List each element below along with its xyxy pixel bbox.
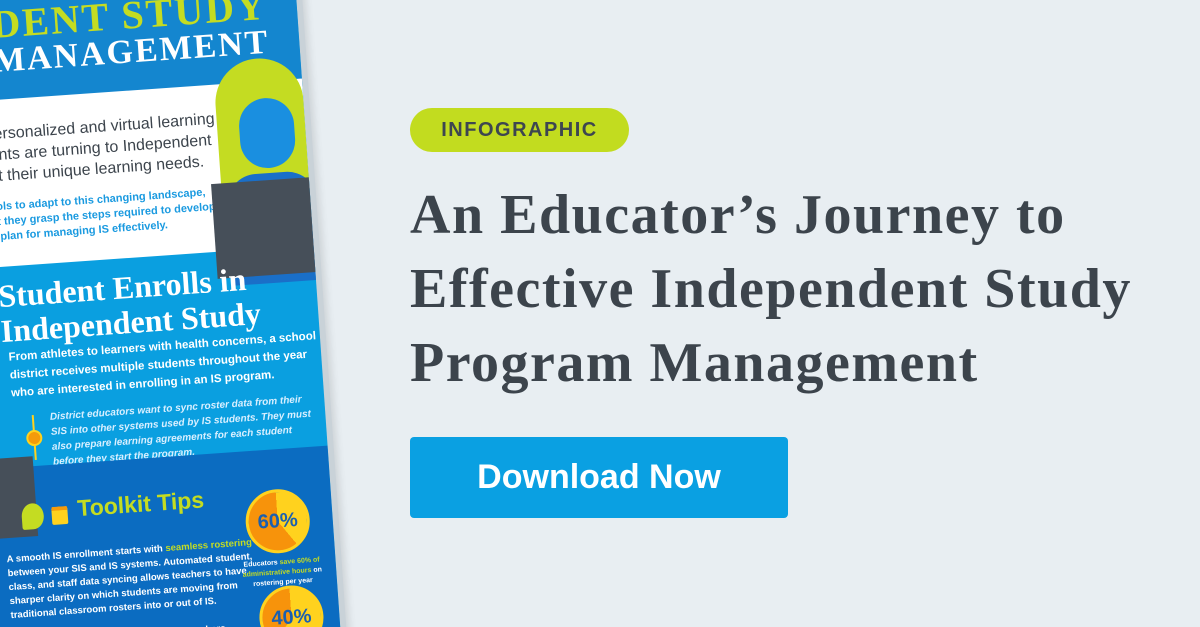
stat 60% xyxy=(244,487,312,555)
infographic preview sheet xyxy=(0,0,342,627)
intro text xyxy=(0,111,215,194)
section italic note: before they start the program. xyxy=(53,447,195,468)
main title: Program Management xyxy=(410,332,979,394)
toolkit heading: Toolkit Tips xyxy=(76,486,205,521)
intro highlight xyxy=(0,187,216,248)
section italic note: also prepare learning agreements for each student xyxy=(52,425,292,453)
stat 60% caption: Educators save 60% of administrative hours on rostering per year xyxy=(242,556,322,588)
main title xyxy=(410,184,1132,394)
illustration: woman with laptop xyxy=(211,58,316,286)
toolkit body xyxy=(6,537,253,627)
toolkit body: between your SIS and IS systems. Automated student, xyxy=(7,551,253,579)
laptop fragment xyxy=(0,456,38,539)
tag: infographic xyxy=(410,108,629,152)
intro white box xyxy=(0,78,314,295)
section body: who are interested in enrolling in an IS program. xyxy=(11,369,275,400)
section italic note: SIS into other systems used by IS students. They must xyxy=(51,409,311,438)
button: download now: Download Now xyxy=(477,458,721,496)
section heading: Student Enrolls in xyxy=(0,261,247,314)
section body xyxy=(8,330,316,400)
section: toolkit tips xyxy=(0,446,342,627)
section heading xyxy=(0,261,262,349)
stat 40% xyxy=(257,583,326,627)
icon: toolbox xyxy=(51,506,68,525)
section italic note: District educators want to sync roster data from their xyxy=(50,394,302,423)
header band xyxy=(0,0,302,132)
main title: Effective Independent Study xyxy=(410,258,1132,320)
toolkit body: sharper clarity on which students are moving from xyxy=(9,580,238,607)
section body: From athletes to learners with health concerns, a school xyxy=(8,330,316,364)
toolkit body: traditional classroom rosters into or out of IS. xyxy=(10,596,217,621)
icon: alert xyxy=(26,415,42,460)
section: student enrolls xyxy=(0,261,316,468)
button: download now xyxy=(410,437,788,518)
tag: infographic: INFOGRAPHIC xyxy=(441,119,598,141)
section heading: Independent Study xyxy=(0,295,262,349)
toolkit body: A smooth IS enrollment starts with seamless rostering xyxy=(6,537,252,565)
main title: An Educator’s Journey to xyxy=(410,184,1066,246)
icon: leaf xyxy=(21,503,45,530)
stat 60%: 60% xyxy=(257,509,298,534)
section body: district receives multiple students throughout the year xyxy=(9,349,307,382)
toolkit body: class, and staff data syncing allows teachers to have xyxy=(8,566,247,593)
section italic note xyxy=(50,394,311,468)
